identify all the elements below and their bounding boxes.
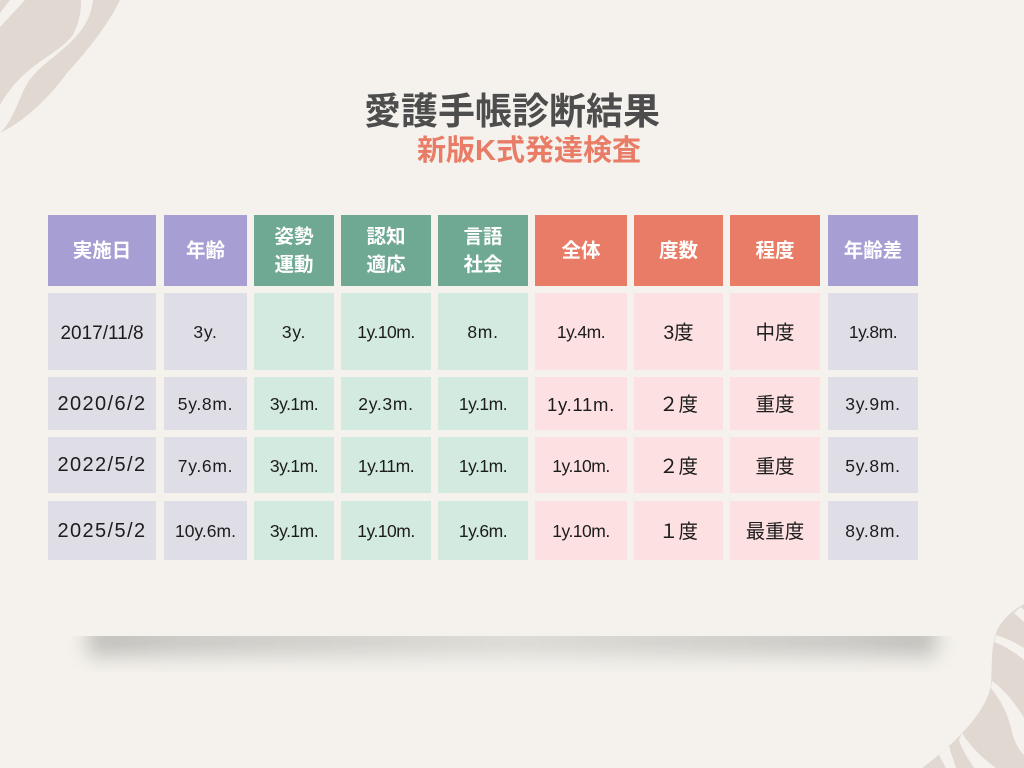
row: 2020/6/2: 1y.11m. [547, 394, 615, 414]
row: 2020/6/2: 2y.3m. [358, 394, 414, 414]
row: 2025/5/2: 8y.8m. [845, 521, 901, 541]
row: 2020/6/2 [48, 377, 918, 430]
row: 2025/5/2: 1y.10m. [552, 521, 610, 541]
row: 2022/5/2: 1y.1m. [459, 456, 507, 476]
row: 2020/6/2: 2020/6/2 [57, 392, 147, 414]
header: 実施日: 実施日 [73, 240, 131, 262]
row: 2020/6/2: 重度 [755, 394, 794, 416]
row: 2022/5/2: 重度 [755, 456, 794, 478]
row: 2022/5/2: ２度 [659, 456, 698, 478]
row: 2017/11/8: 2017/11/8 [60, 322, 144, 344]
row: 2017/11/8: 3y. [193, 322, 218, 342]
header: 姿勢運動: 運動 [274, 254, 314, 276]
header: 度数: 度数 [659, 240, 698, 262]
header: 年齢差: 年齢差 [844, 240, 902, 262]
row: 2022/5/2 [48, 437, 918, 493]
row: 2025/5/2: 3y.1m. [270, 521, 318, 541]
row: 2022/5/2: 1y.11m. [358, 456, 414, 476]
row: 2022/5/2: 5y.8m. [845, 456, 901, 476]
header: 姿勢運動: 姿勢 [274, 226, 314, 248]
header: 実施日 [48, 215, 156, 286]
row: 2017/11/8: 1y.8m. [849, 322, 897, 342]
row: 2025/5/2: １度 [659, 521, 698, 543]
header: 年齢: 年齢 [186, 240, 225, 262]
row: 2025/5/2: 10y.6m. [175, 521, 236, 541]
header: 程度 [730, 215, 820, 286]
row: 2020/6/2: ２度 [659, 394, 698, 416]
row: 2022/5/2: 1y.10m. [552, 456, 610, 476]
row: 2017/11/8: 1y.4m. [557, 322, 605, 342]
row: 2017/11/8: 1y.10m. [357, 322, 415, 342]
decoration: top-left leaf [0, 0, 120, 133]
row: 2025/5/2: 1y.6m. [459, 521, 507, 541]
header row [48, 215, 918, 286]
row: 2020/6/2: 1y.1m. [459, 394, 507, 414]
row: 2025/5/2: 1y.10m. [357, 521, 415, 541]
header: 年齢差 [828, 215, 918, 286]
row: 2022/5/2: 3y.1m. [270, 456, 318, 476]
row: 2022/5/2: 7y.6m. [178, 456, 233, 476]
header: 認知適応: 適応 [366, 254, 406, 276]
header: 全体: 全体 [561, 240, 600, 262]
header: 全体 [535, 215, 627, 286]
title: 愛護手帳診断結果 [364, 91, 660, 132]
header: 認知適応 [341, 215, 431, 286]
row: 2017/11/8: 中度 [755, 322, 794, 344]
shadow under table [78, 636, 946, 666]
row: 2025/5/2 [48, 501, 918, 560]
table [48, 215, 918, 560]
header: 度数 [634, 215, 723, 286]
row: 2017/11/8 [48, 293, 918, 370]
header: 認知適応: 認知 [366, 226, 406, 248]
row: 2020/6/2: 3y.9m. [845, 394, 901, 414]
header: 程度: 程度 [755, 240, 794, 262]
row: 2017/11/8: 8m. [467, 322, 499, 342]
header: 言語社会: 社会 [463, 254, 502, 276]
header: 言語社会: 言語 [463, 226, 502, 248]
row: 2025/5/2: 最重度 [746, 521, 804, 543]
decoration: bottom-right leaf [922, 604, 1024, 768]
row: 2017/11/8: 3度 [663, 322, 694, 344]
row: 2020/6/2: 3y.1m. [270, 394, 318, 414]
header: 姿勢運動 [254, 215, 334, 286]
row: 2017/11/8: 3y. [282, 322, 306, 342]
row: 2025/5/2: 2025/5/2 [57, 520, 147, 542]
header: 年齢 [164, 215, 247, 286]
subtitle: 新版K式発達検査 [417, 135, 641, 167]
row: 2020/6/2: 5y.8m. [178, 394, 233, 414]
header: 言語社会 [438, 215, 528, 286]
row: 2022/5/2: 2022/5/2 [57, 454, 147, 476]
